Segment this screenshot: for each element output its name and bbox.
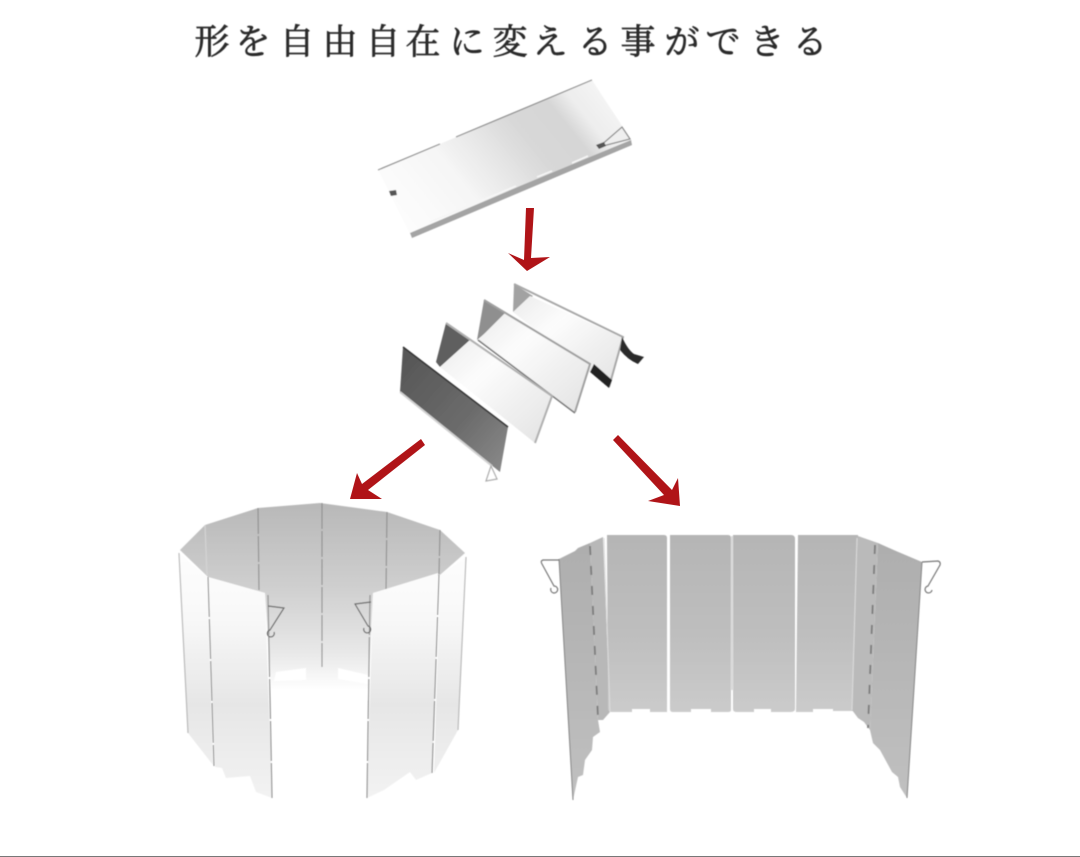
panel seams: [731, 536, 733, 690]
arrow: middle to left: [350, 439, 425, 499]
fold 2: [436, 323, 470, 367]
fold 4: [513, 284, 533, 312]
dark face: [400, 347, 508, 472]
centre panels: [607, 535, 667, 712]
far left panels: [559, 543, 600, 800]
far right panels: [852, 536, 878, 730]
accordion-folded windscreen (middle): [400, 284, 644, 481]
bottom rule: [0, 856, 1080, 857]
panel seams: [179, 553, 466, 733]
clip right: [355, 602, 371, 633]
fold 3: [477, 300, 508, 340]
folded windscreen (top): [378, 80, 632, 238]
clip right: [922, 561, 940, 593]
round windscreen (bottom left): [179, 503, 466, 798]
floor highlights: [274, 668, 306, 681]
arrow: middle to right: [613, 435, 680, 506]
back wall: [180, 503, 465, 700]
clip left: [267, 606, 284, 637]
arrow: top to middle: [508, 208, 550, 271]
title: 形を自由自在に変える事ができる: [194, 23, 828, 62]
front-right panels: [367, 573, 438, 798]
clip left: [541, 560, 559, 593]
front-left panels: [179, 553, 213, 765]
wall-shaped windscreen (bottom right): [541, 535, 940, 800]
